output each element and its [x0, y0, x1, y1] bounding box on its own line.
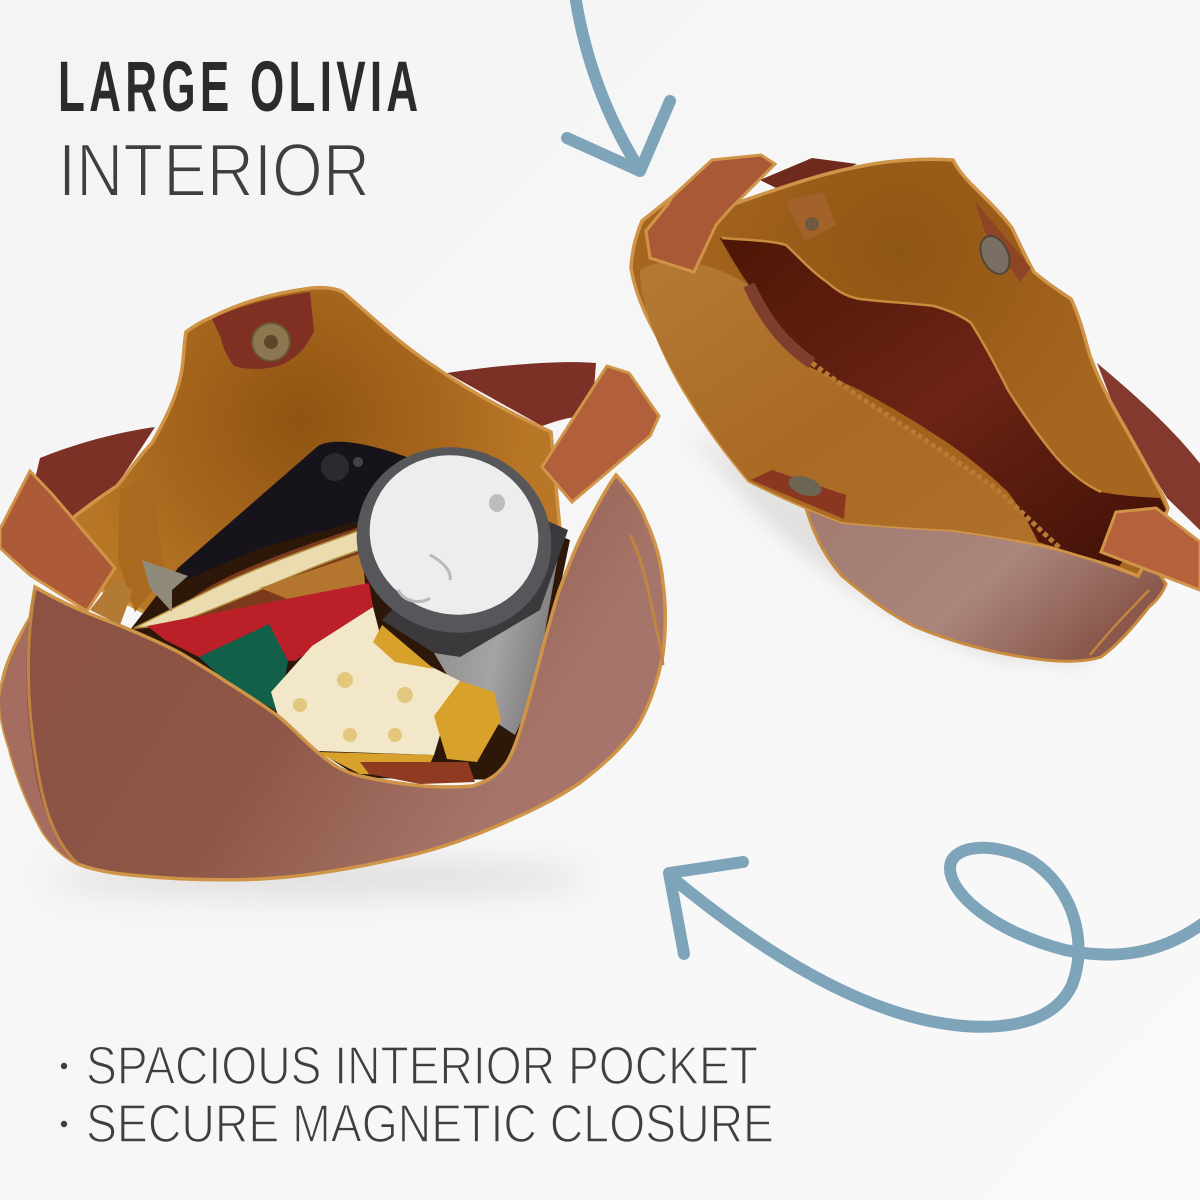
leather front panel [0, 475, 665, 880]
bullet: pocket [61, 1063, 67, 1069]
zig-zag pocket edge [812, 363, 1060, 548]
text: secure magnetic closure: SECURE MAGNETIC CLOSURE [86, 1094, 774, 1154]
phone [178, 442, 412, 580]
brass snap [252, 323, 290, 361]
zip pouch [130, 526, 365, 630]
tab snap [805, 217, 819, 231]
red wallet [147, 583, 373, 661]
snap tab on rim [975, 201, 1031, 282]
snap centre [264, 335, 278, 349]
arrow: looping arrow pointing to left bag [669, 848, 1200, 1027]
suede front left wall [640, 262, 1060, 548]
text: spacious interior pocket: SPACIOUS INTERIOR POCKET [86, 1036, 758, 1096]
side suede strip near key [118, 475, 165, 612]
pocket edge seam [722, 238, 1101, 492]
bag shadow [690, 430, 1100, 665]
key charm [142, 560, 188, 612]
dark interior behind contents [130, 521, 570, 780]
leather lower panel [805, 505, 1166, 661]
thermos body [382, 500, 568, 735]
seam on lower panel [1090, 590, 1149, 655]
stitched pocket binding [749, 285, 812, 363]
heading: large olivia: LARGE OLIVIA [58, 47, 418, 127]
suede back wall [62, 288, 560, 615]
phone camera [321, 453, 363, 481]
side seam right [630, 535, 663, 665]
bag shadow [50, 860, 590, 896]
right handle loop [542, 366, 659, 502]
patterned scarf [271, 607, 501, 775]
silver snap [975, 231, 1015, 279]
side seam left [28, 590, 78, 864]
bullet list [61, 1036, 774, 1154]
bag: right, empty interior view [631, 155, 1200, 665]
bullet: closure [61, 1121, 67, 1127]
handle loop right [1101, 508, 1200, 590]
handle suede flap [90, 578, 133, 625]
front snap [786, 472, 824, 500]
dark pocket opening [720, 238, 1166, 566]
thermos lid tab [398, 555, 450, 602]
suede interior [631, 159, 1168, 576]
small strap tab [786, 192, 836, 241]
back strap [30, 362, 596, 560]
heading: interior: INTERIOR [58, 128, 370, 212]
handle loop top [646, 155, 775, 272]
green wallet [199, 624, 288, 712]
title [58, 47, 418, 212]
back strap [1097, 363, 1200, 535]
thermos lid top [347, 432, 561, 638]
arrow: top pointing to right bag [567, 0, 670, 171]
pink worn side panel left [0, 618, 78, 864]
thermos sip hole [489, 494, 505, 512]
top back strap [760, 158, 857, 195]
thermos lid rim [330, 420, 578, 660]
left handle loop [0, 471, 115, 611]
bag: left, filled with items [0, 288, 665, 896]
front snap tab [751, 470, 846, 519]
snap tab on flap [212, 292, 314, 369]
front closure tab [360, 762, 475, 784]
